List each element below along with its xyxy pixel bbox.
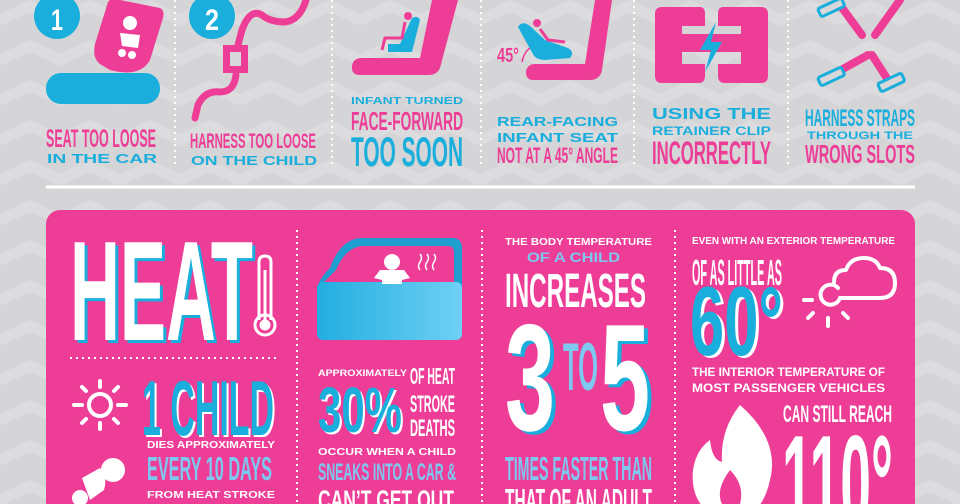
stat: 30%: SNEAKS INTO A CAR & [318, 459, 456, 486]
column separators [175, 0, 788, 168]
panel: retainer clip [652, 7, 771, 171]
stat: 3 to 5: OF A CHILD [527, 249, 620, 265]
panel: face forward [351, 0, 464, 175]
stat: 3 to 5: 5 [600, 293, 650, 463]
text: face forward: FACE-FORWARD [351, 106, 463, 136]
icon: sun [74, 381, 126, 429]
stat: 3 to 5: TO [563, 329, 598, 405]
text: harness too loose: ON THE CHILD [191, 153, 317, 168]
text: wrong slots [805, 109, 914, 164]
stat: 1 child [144, 380, 275, 498]
text: seat too loose [46, 129, 156, 163]
icon: clip [655, 7, 768, 83]
panel: heat: STROKE [410, 391, 455, 418]
icon: cloud and sun [804, 258, 895, 326]
stat: 1 child: EVERY 10 DAYS [147, 450, 272, 487]
text: wrong slots: THROUGH THE [807, 130, 913, 142]
stat: 60 to 110: EVEN WITH AN EXTERIOR TEMPERATURE [692, 236, 895, 247]
icon: reclined seat [497, 0, 612, 80]
panel: heat: TIMES FASTER THAN [505, 450, 652, 487]
icon: wavy strap [195, 0, 306, 118]
panel: heat: OF HEAT [410, 363, 455, 389]
stat: 30%: 30% [320, 376, 404, 448]
panel: wrong slots [805, 0, 915, 169]
text: rear facing: REAR-FACING [497, 114, 618, 129]
icon: crossed straps [818, 0, 905, 92]
icon: flame [693, 405, 772, 504]
stat: 3 to 5: 3 [505, 293, 555, 463]
panel: seat too loose [34, 0, 164, 166]
stat: 3 to 5: 5 [604, 296, 654, 466]
stat: 60 to 110: MOST PASSENGER VEHICLES [692, 383, 885, 395]
text: rear facing: INFANT SEAT [497, 130, 618, 145]
icon: car window [317, 238, 462, 340]
stat: 3 to 5: INCREASES [505, 265, 646, 318]
stat: 60 to 110: 60° [693, 268, 786, 378]
panel: harness too loose [189, 0, 317, 168]
text: retainer clip: USING THE [652, 106, 771, 123]
stat: 30%: 30% [318, 374, 402, 446]
icon: loose seat [46, 0, 164, 104]
panel: heat: HEAT [70, 212, 253, 371]
text: seat too loose: SEAT TOO LOOSE [46, 125, 156, 153]
panel: heat: DEATHS [410, 415, 455, 442]
icon: number 2: 2 [205, 4, 219, 37]
stat: 30% [318, 363, 456, 504]
icon: reclined seat: 45° [497, 45, 519, 67]
stat: 1 child: FROM HEAT STROKE [147, 489, 275, 501]
text: harness too loose: HARNESS TOO LOOSE [190, 130, 316, 153]
text: harness too loose [190, 134, 316, 165]
stat: 60 to 110 [690, 236, 895, 504]
icon: number 1 [34, 0, 80, 39]
stat: 3 to 5 [505, 237, 654, 504]
text: face forward [351, 97, 462, 166]
text: seat too loose: IN THE CAR [47, 151, 158, 166]
icon: forward seat [352, 0, 458, 75]
stat: 3 to 5: THE BODY TEMPERATURE [505, 237, 652, 248]
panel: rear facing [497, 0, 618, 168]
icon: number 2 [189, 0, 235, 39]
icon: number 1: 1 [51, 4, 63, 37]
text: face forward: INFANT TURNED [351, 95, 464, 107]
text: rear facing: NOT AT A 45° ANGLE [497, 143, 618, 168]
panel: heat: 1 CHILD [144, 366, 276, 454]
stat: 60 to 110: THE INTERIOR TEMPERATURE OF [692, 367, 885, 379]
stat: 3 to 5: 3 [509, 296, 559, 466]
icon: baby [72, 458, 125, 504]
icon: thermometer [255, 256, 275, 335]
stat: 1 child: DIES APPROXIMATELY [147, 439, 275, 451]
text: TOO SOON [351, 128, 463, 175]
panel: heat: 1 CHILD [142, 364, 274, 452]
stat: 30%: APPROXIMATELY [318, 368, 408, 379]
stat: 30%: OCCUR WHEN A CHILD [318, 446, 456, 458]
heading: HEAT [74, 242, 256, 343]
text: rear facing [498, 117, 618, 163]
panel: heat: HEAT [73, 215, 256, 374]
text: retainer clip: RETAINER CLIP [652, 124, 771, 138]
text: retainer clip [653, 108, 771, 164]
text: retainer clip: INCORRECTLY [652, 135, 771, 171]
panel: heat [46, 210, 915, 504]
stat: 60 to 110: 60° [690, 266, 783, 376]
